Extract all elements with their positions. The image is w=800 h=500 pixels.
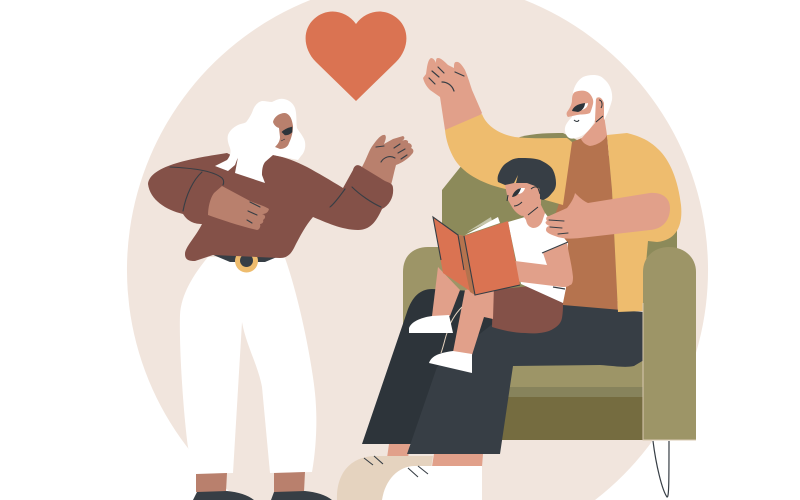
brown sweater bbox=[148, 153, 393, 261]
strap line bbox=[441, 307, 462, 353]
grandfather front arm and hand bbox=[546, 193, 670, 239]
white t-shirt bbox=[508, 213, 568, 303]
hand on chest bbox=[208, 186, 269, 230]
grandfather figure bbox=[337, 58, 681, 500]
white page bbox=[465, 217, 500, 235]
shoes bbox=[193, 491, 332, 500]
black hair bbox=[498, 158, 556, 200]
face bbox=[567, 91, 593, 117]
beige shoe bbox=[337, 456, 433, 500]
white hair and beard bbox=[565, 75, 612, 139]
white hair bbox=[215, 99, 305, 183]
child ear bbox=[531, 187, 540, 194]
shoe lace marks bbox=[364, 456, 428, 477]
armchair back bbox=[442, 133, 677, 300]
armchair left arm bbox=[403, 247, 470, 370]
child figure bbox=[409, 158, 573, 373]
yellow cardigan bbox=[445, 114, 681, 312]
white trousers bbox=[180, 257, 316, 474]
face bbox=[273, 113, 293, 149]
eye and lashes bbox=[281, 127, 292, 141]
icon: heart bbox=[306, 12, 406, 101]
sleeve and waist lines bbox=[542, 242, 568, 289]
ankles bbox=[196, 472, 305, 492]
sweater and hand creases bbox=[170, 144, 407, 223]
raised arm bbox=[423, 58, 482, 130]
seat cushion bbox=[500, 360, 645, 388]
open book bbox=[433, 217, 520, 295]
spine bbox=[458, 236, 475, 295]
seat base bbox=[490, 397, 645, 440]
book outline bbox=[433, 217, 520, 295]
rear shoe bbox=[409, 315, 453, 333]
grandmother figure bbox=[148, 99, 413, 500]
armchair seat bbox=[490, 360, 645, 440]
child face lines bbox=[507, 195, 538, 215]
eye bbox=[572, 103, 588, 112]
shirt body bbox=[520, 135, 618, 312]
front shoe bbox=[429, 351, 472, 373]
far ankle bbox=[387, 444, 410, 458]
brown shorts bbox=[492, 285, 563, 333]
fingers creases bbox=[549, 220, 568, 234]
front leg bbox=[453, 285, 494, 355]
rear leg bbox=[432, 267, 460, 316]
white shoe bbox=[382, 466, 482, 500]
face lines bbox=[574, 100, 603, 122]
face bbox=[505, 183, 541, 216]
child arm and hand bbox=[494, 243, 573, 287]
near ankle bbox=[432, 454, 483, 467]
grey page bbox=[467, 217, 492, 232]
far trouser leg bbox=[362, 289, 495, 444]
hand creases bbox=[497, 264, 507, 276]
cushion shadow bbox=[500, 387, 645, 397]
raised hand bbox=[362, 135, 413, 190]
background circle bbox=[127, 0, 708, 500]
near trouser leg bbox=[407, 305, 644, 454]
raised-hand creases bbox=[429, 67, 464, 91]
neck bbox=[522, 203, 545, 228]
neck and ear bbox=[581, 97, 607, 146]
neck bbox=[264, 147, 276, 164]
chair leg bbox=[653, 441, 669, 497]
child eye bbox=[512, 188, 525, 197]
armchair arm edge bbox=[643, 303, 696, 440]
armchair right arm bbox=[643, 247, 696, 440]
book cover bbox=[433, 217, 520, 295]
belt and buckle bbox=[211, 250, 277, 272]
